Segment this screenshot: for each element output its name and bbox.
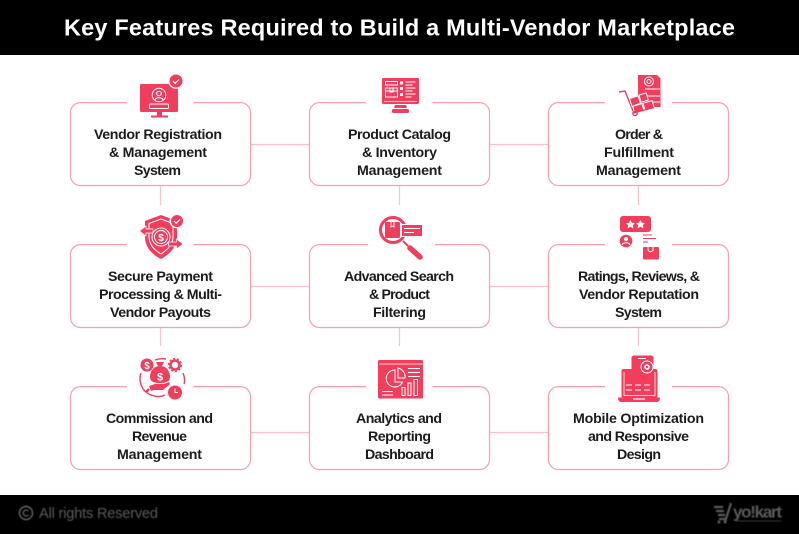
footer logo: yo!kart: yo!kart (733, 502, 782, 522)
card: advanced search: Advanced Search (344, 269, 454, 285)
card: commission revenue: Management (117, 447, 202, 463)
card: vendor registration: Vendor Registration (94, 127, 222, 143)
card: commission revenue: Revenue (132, 429, 187, 445)
card: secure payment: Processing & Multi- (99, 287, 222, 303)
icon: vendor monitor with badge (140, 73, 184, 118)
card: secure payment: Vendor Payouts (110, 305, 211, 321)
icon: product catalog monitor (382, 78, 419, 113)
card: mobile optimization (548, 387, 728, 470)
card: commission revenue: Commission and (106, 411, 213, 427)
card: analytics: Reporting (368, 429, 431, 445)
icon: analytics dashboard (378, 360, 423, 398)
icon: commission money cycle (140, 358, 185, 400)
icon: commission money cycle: $ (144, 361, 150, 372)
icon: ratings bubble and reviews (620, 216, 659, 260)
card: mobile optimization: Design (617, 447, 661, 463)
icon: secure payment shield: $ (158, 232, 164, 244)
icon: commission money cycle: $ (157, 372, 163, 384)
copyright notice: All rights Reserved (39, 506, 158, 522)
card: commission revenue (70, 387, 251, 470)
card: order fulfillment: Order & (615, 127, 663, 143)
card: product catalog: Management (357, 163, 442, 179)
card: advanced search: Filtering (373, 305, 426, 321)
card: analytics (310, 387, 490, 470)
card: secure payment: Secure Payment (108, 269, 213, 285)
card: advanced search: & Product (369, 287, 430, 303)
card: order fulfillment: Management (596, 163, 681, 179)
header band with title: Key Features Required to Build a Multi-Vendor Marketplace (64, 14, 735, 40)
card: ratings reviews (548, 245, 728, 328)
footer logo: yo!kart (714, 502, 782, 524)
card: secure payment (70, 245, 251, 328)
card: vendor registration: System (134, 163, 181, 179)
card: vendor registration (70, 103, 251, 186)
icon: order document and cart (619, 75, 660, 116)
connector lines (160, 144, 638, 432)
card: analytics: Dashboard (365, 447, 434, 463)
card: mobile optimization: and Responsive (588, 429, 689, 445)
icon: secure payment shield (140, 214, 184, 259)
card: mobile optimization: Mobile Optimization (573, 411, 704, 427)
card: order fulfillment: Fulfillment (604, 145, 674, 161)
card: vendor registration: & Management (109, 145, 207, 161)
card: product catalog: Product Catalog (348, 127, 451, 143)
card: analytics: Analytics and (356, 411, 442, 427)
icon: mobile laptop and gear (618, 356, 660, 402)
card: advanced search (310, 245, 490, 328)
card: ratings reviews: Ratings, Reviews, & (578, 269, 700, 285)
card: product catalog (310, 103, 490, 186)
card: ratings reviews: System (615, 305, 662, 321)
card: product catalog: & Inventory (362, 145, 437, 161)
header band with title (0, 0, 799, 55)
icon: search magnifier with box (380, 218, 423, 257)
card: order fulfillment (548, 103, 728, 186)
card: ratings reviews: Vendor Reputation (579, 287, 699, 303)
footer band (0, 495, 799, 534)
